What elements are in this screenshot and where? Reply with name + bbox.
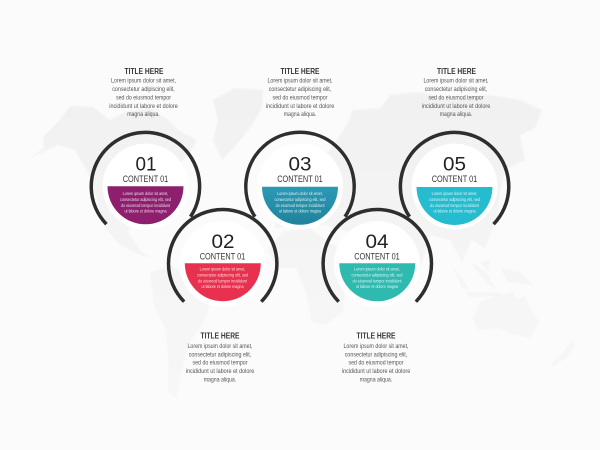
step 01: do eiusmod tempor incididunt (121, 203, 171, 208)
bottom text block 4 (342, 332, 411, 384)
top text block 3: Lorem ipsum dolor sit amet, (268, 78, 333, 84)
top text block 3: consectetur adipiscing elit, (269, 86, 331, 93)
top text block 3: magna aliqua. (284, 111, 316, 118)
step 02: ut labore et dolore magna (202, 284, 244, 289)
bottom text block 4: magna aliqua. (360, 376, 392, 384)
step 05: CONTENT 01 (432, 174, 477, 184)
top text block 5: sed do eiusmod tempor (428, 94, 484, 102)
step 05: do eiusmod tempor incididunt (430, 203, 480, 208)
step 03: Lorem ipsum dolor sit amet, (277, 191, 323, 196)
step 03: ut labore et dolore magna (279, 208, 322, 214)
bottom text block 2: incididunt ut labore et dolore (186, 368, 255, 375)
bottom text block 2: Lorem ipsum dolor sit amet, (188, 343, 253, 350)
bottom text block 4: incididunt ut labore et dolore (342, 368, 411, 375)
step 04: 04 (366, 232, 389, 253)
step 01: consectetur adipiscing elit, sed (120, 197, 172, 202)
step 04: consectetur adipiscing elit, sed (352, 272, 403, 278)
top text block 5: Lorem ipsum dolor sit amet, (424, 78, 489, 84)
step 01: ut labore et dolore magna (124, 208, 167, 214)
step 03 (246, 132, 354, 230)
step 05 (400, 132, 509, 230)
step 03: consectetur adipiscing elit, sed (274, 197, 326, 202)
step 02: do eiusmod tempor incididunt (198, 278, 248, 284)
top text block 5: consectetur adipiscing elit, (425, 86, 487, 93)
top text block 3: TITLE HERE (280, 67, 320, 76)
step 04 (323, 209, 431, 307)
step 02 (168, 209, 277, 307)
top text block 1: sed do eiusmod tempor (116, 94, 172, 102)
top text block 5: TITLE HERE (437, 67, 477, 76)
top text block 5: magna aliqua. (440, 111, 472, 118)
step 01 (91, 132, 200, 230)
step 02: 02 (212, 232, 234, 253)
top text block 1 (109, 67, 178, 118)
top text block 5 (422, 67, 491, 118)
step 04: Lorem ipsum dolor sit amet, (354, 266, 400, 272)
step 04: CONTENT 01 (354, 252, 400, 262)
step 01: 01 (136, 154, 156, 176)
step 01: Lorem ipsum dolor sit amet, (123, 191, 168, 196)
step 02: Lorem ipsum dolor sit amet, (200, 266, 245, 272)
bottom text block 2: TITLE HERE (200, 332, 240, 340)
step 04: ut labore et dolore magna (356, 284, 399, 289)
bottom text block 2: consectetur adipiscing elit, (189, 352, 251, 358)
step 05: ut labore et dolore magna (434, 208, 476, 214)
top text block 1: TITLE HERE (124, 67, 164, 76)
step 05: Lorem ipsum dolor sit amet, (432, 191, 477, 196)
step 04: do eiusmod tempor incididunt (352, 278, 402, 284)
bottom text block 4: Lorem ipsum dolor sit amet, (344, 343, 409, 350)
step 05: consectetur adipiscing elit, sed (429, 197, 481, 202)
top text block 1: Lorem ipsum dolor sit amet, (111, 78, 176, 84)
top text block 3: sed do eiusmod tempor (272, 94, 328, 102)
step 05: 05 (443, 154, 466, 176)
step 03: do eiusmod tempor incididunt (276, 203, 325, 208)
top text block 3 (266, 67, 335, 118)
step 03: 03 (288, 154, 312, 176)
step 02: consectetur adipiscing elit, sed (197, 272, 249, 278)
step 03: CONTENT 01 (277, 174, 323, 184)
top text block 1: magna aliqua. (127, 111, 160, 118)
bottom text block 2 (186, 332, 255, 384)
top text block 1: incididunt ut labore et dolore (109, 103, 178, 110)
bottom text block 4: consectetur adipiscing elit, (345, 352, 407, 358)
top text block 5: incididunt ut labore et dolore (422, 103, 491, 110)
bottom text block 4: sed do eiusmod tempor (348, 360, 404, 366)
bottom text block 2: magna aliqua. (204, 376, 236, 384)
top text block 1: consectetur adipiscing elit, (112, 86, 175, 93)
world map background (30, 88, 575, 398)
top text block 3: incididunt ut labore et dolore (266, 103, 335, 110)
bottom text block 4: TITLE HERE (356, 332, 396, 340)
step 01: CONTENT 01 (123, 174, 168, 184)
step 02: CONTENT 01 (200, 252, 245, 262)
bottom text block 2: sed do eiusmod tempor (192, 360, 248, 366)
